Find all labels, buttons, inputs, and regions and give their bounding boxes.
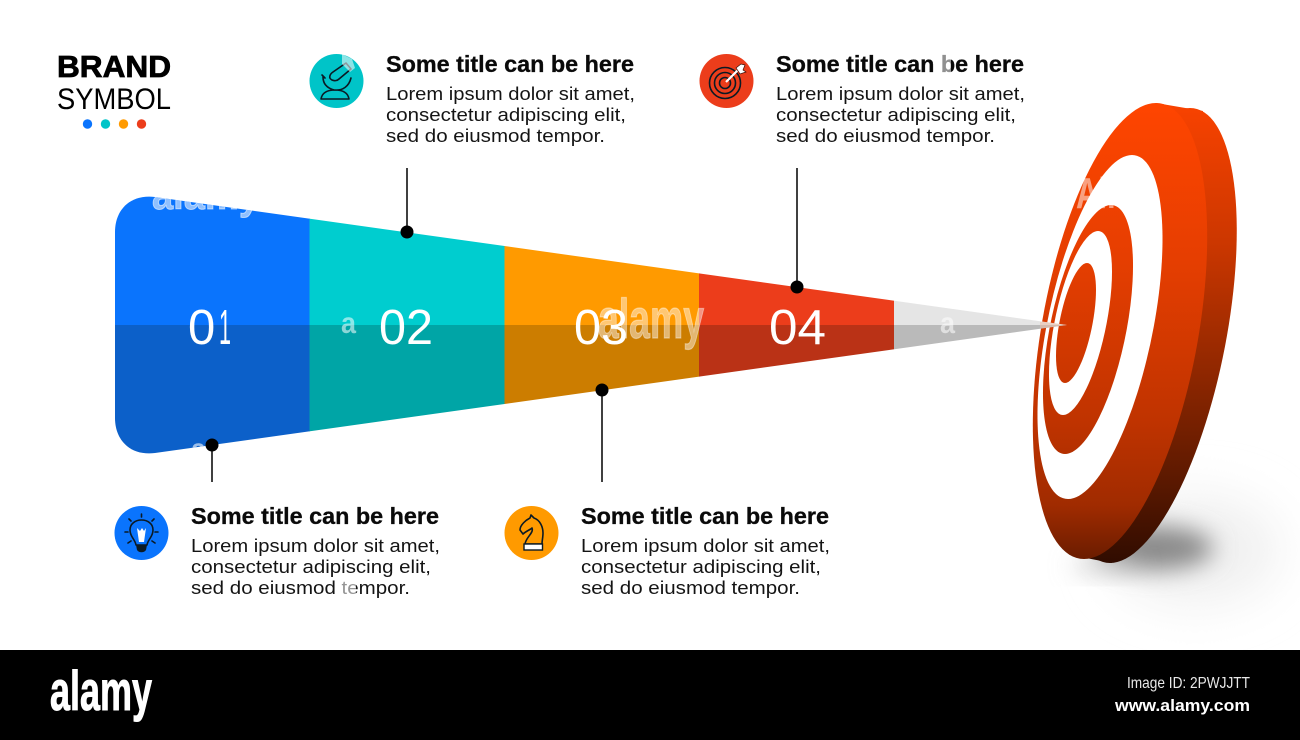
body: Lorem ipsum dolor sit amet, [386,84,635,104]
connector 02 [400,168,414,238]
funnel arrow pointing to target [115,196,1067,454]
body: consectetur adipiscing elit, [776,105,1016,125]
body [776,84,1025,146]
body: consectetur adipiscing elit, [581,557,821,577]
number 04: 04 [769,301,826,355]
brand subtitle: SYMBOL [57,83,171,116]
central watermark: alamy [598,287,704,350]
target board [1032,103,1237,563]
body: sed do eiusmod tempor. [776,126,995,146]
middle red ring [1042,205,1133,454]
watermark fragment on blue: alamy [152,171,261,218]
watermark letter on teal: a [341,307,356,340]
image id: Image ID: 2PWJJTT [1127,675,1250,692]
brand colour dots [83,119,146,129]
footer logo: alamy [50,659,152,722]
segment 02 [310,218,504,432]
body [386,84,635,146]
target side wall [1088,103,1237,563]
text block: top right [776,51,1025,146]
body [581,536,830,598]
icon: target and dart [700,54,754,108]
icon: chess knight [504,506,558,560]
body: consectetur adipiscing elit, [386,105,626,125]
icon: microscope [310,54,364,108]
number 01 [188,301,231,355]
segment 03 [504,246,700,404]
target shadow [1071,495,1280,605]
connector 01 [206,438,218,482]
number 03: 03 [574,301,628,355]
connector 04 [790,168,804,294]
title: Some title can be here [581,503,829,529]
outer white ring [1014,155,1186,499]
connector 03 [596,384,608,482]
text block: bottom right [581,503,830,598]
text block: top left [386,51,635,146]
watermark on target: Aln [1076,169,1126,218]
watermark letter on lower blue: a [191,433,206,464]
icon: light bulb [114,506,168,560]
number 02: 02 [379,301,433,355]
title: Some title can be here [776,51,1024,77]
website: www.alamy.com [1114,696,1250,715]
body: sed do eiusmod tempor. [581,578,800,598]
watermark fades over text [340,54,951,595]
segment 01 [115,190,310,460]
bullseye [1056,263,1096,383]
number 01: 0 [188,301,215,355]
body: Lorem ipsum dolor sit amet, [191,536,440,556]
body [191,536,440,598]
title: Some title can be here [386,51,634,77]
segment 04 [699,273,894,377]
brand name: BRAND [57,49,171,84]
body: sed do eiusmod tempor. [191,578,410,598]
body: consectetur adipiscing elit, [191,557,431,577]
body: Lorem ipsum dolor sit amet, [581,536,830,556]
watermark letter on grey: a [940,307,955,340]
brand logo [57,49,171,129]
text block: bottom left [191,503,440,598]
text: 1 [219,301,231,355]
inner white ring [1037,231,1124,415]
footer bar [0,650,1300,740]
target front face [1032,103,1208,559]
arrow tip [894,300,1067,350]
body: sed do eiusmod tempor. [386,126,605,146]
body: Lorem ipsum dolor sit amet, [776,84,1025,104]
title: Some title can be here [191,503,439,529]
